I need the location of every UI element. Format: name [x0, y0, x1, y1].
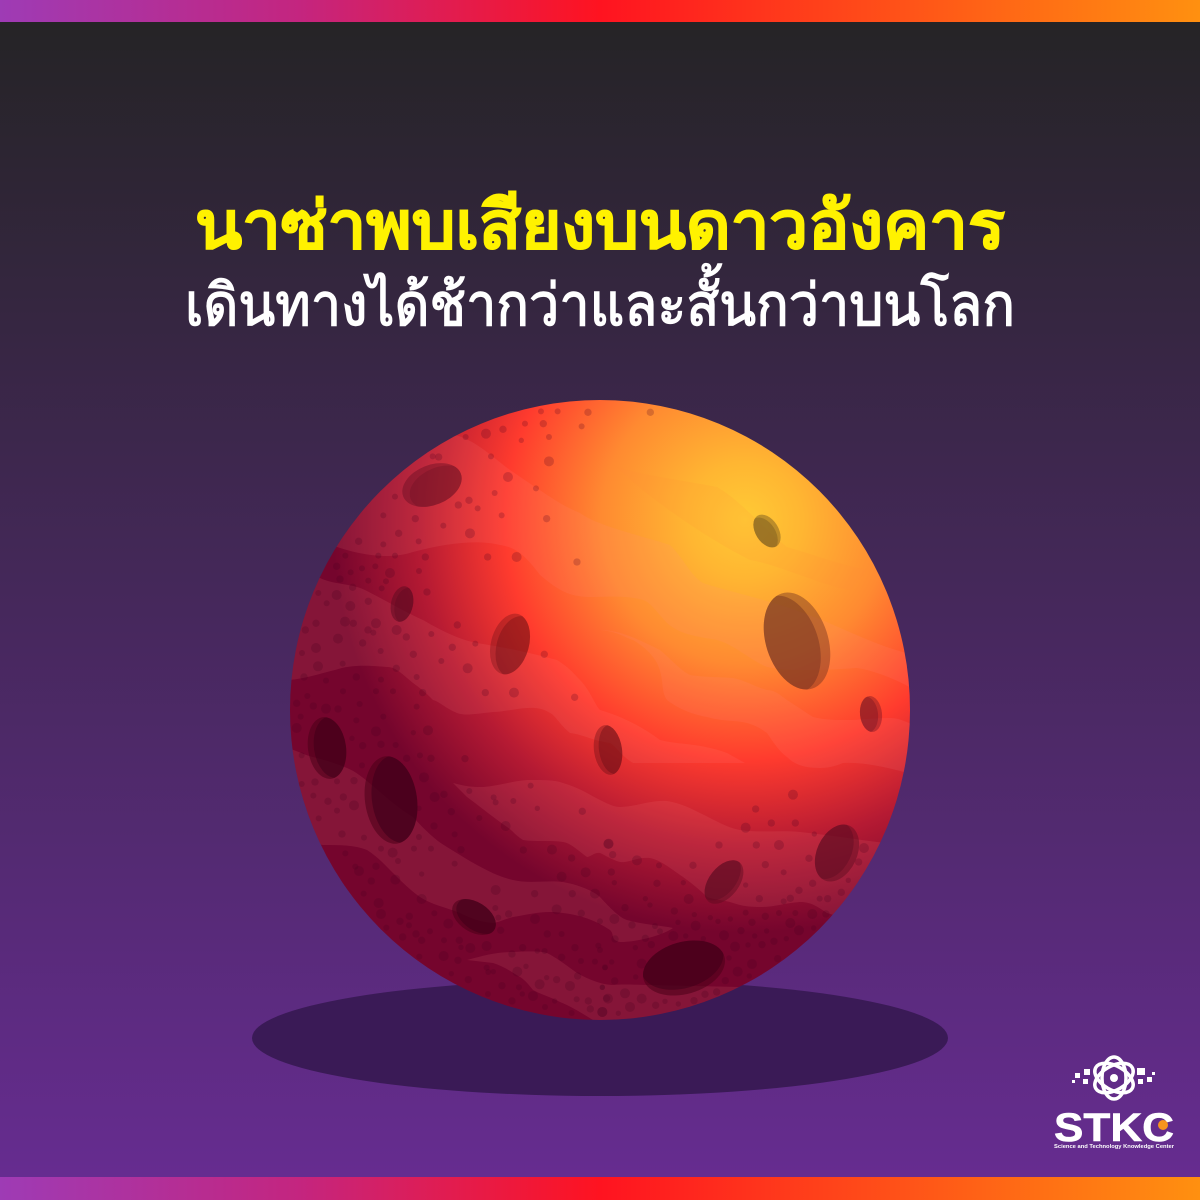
crater 3 [764, 592, 830, 690]
crater 12 [704, 860, 744, 904]
crater 10 [452, 899, 496, 935]
faint upper highlight band [617, 467, 867, 590]
crater 8 [308, 717, 346, 779]
logo: STKC [1054, 1057, 1175, 1150]
planet ground shadow [252, 980, 948, 1096]
crater 11 [814, 824, 860, 882]
top gradient bar [0, 0, 1200, 22]
crater 5 [490, 614, 530, 674]
title: headline: นาซ่าพบเสียงบนดาวอังคาร [195, 188, 1005, 262]
crater 13 [643, 940, 725, 996]
logo wordmark: STKC [1054, 1106, 1174, 1150]
logo orange dot [1158, 1120, 1168, 1130]
crater 9 [364, 756, 418, 844]
logo pixel squares [1072, 1068, 1155, 1084]
crater 6 [860, 696, 882, 732]
crater 1 [402, 463, 462, 507]
logo atom icon [1090, 1057, 1138, 1099]
logo tagline: Science and Technology Knowledge Center [1054, 1144, 1175, 1150]
crater 7 [594, 725, 622, 775]
planet Mars [270, 400, 915, 1040]
surface bands [270, 420, 915, 1040]
surface speckles [292, 408, 869, 1017]
crater 2 [753, 514, 781, 548]
title: subheading: เดินทางได้ช้ากว่าและสั้นกว่าบนโลก [185, 264, 1015, 338]
bottom gradient bar [0, 1177, 1200, 1200]
crater 4 [390, 586, 414, 622]
craters [304, 453, 884, 1005]
